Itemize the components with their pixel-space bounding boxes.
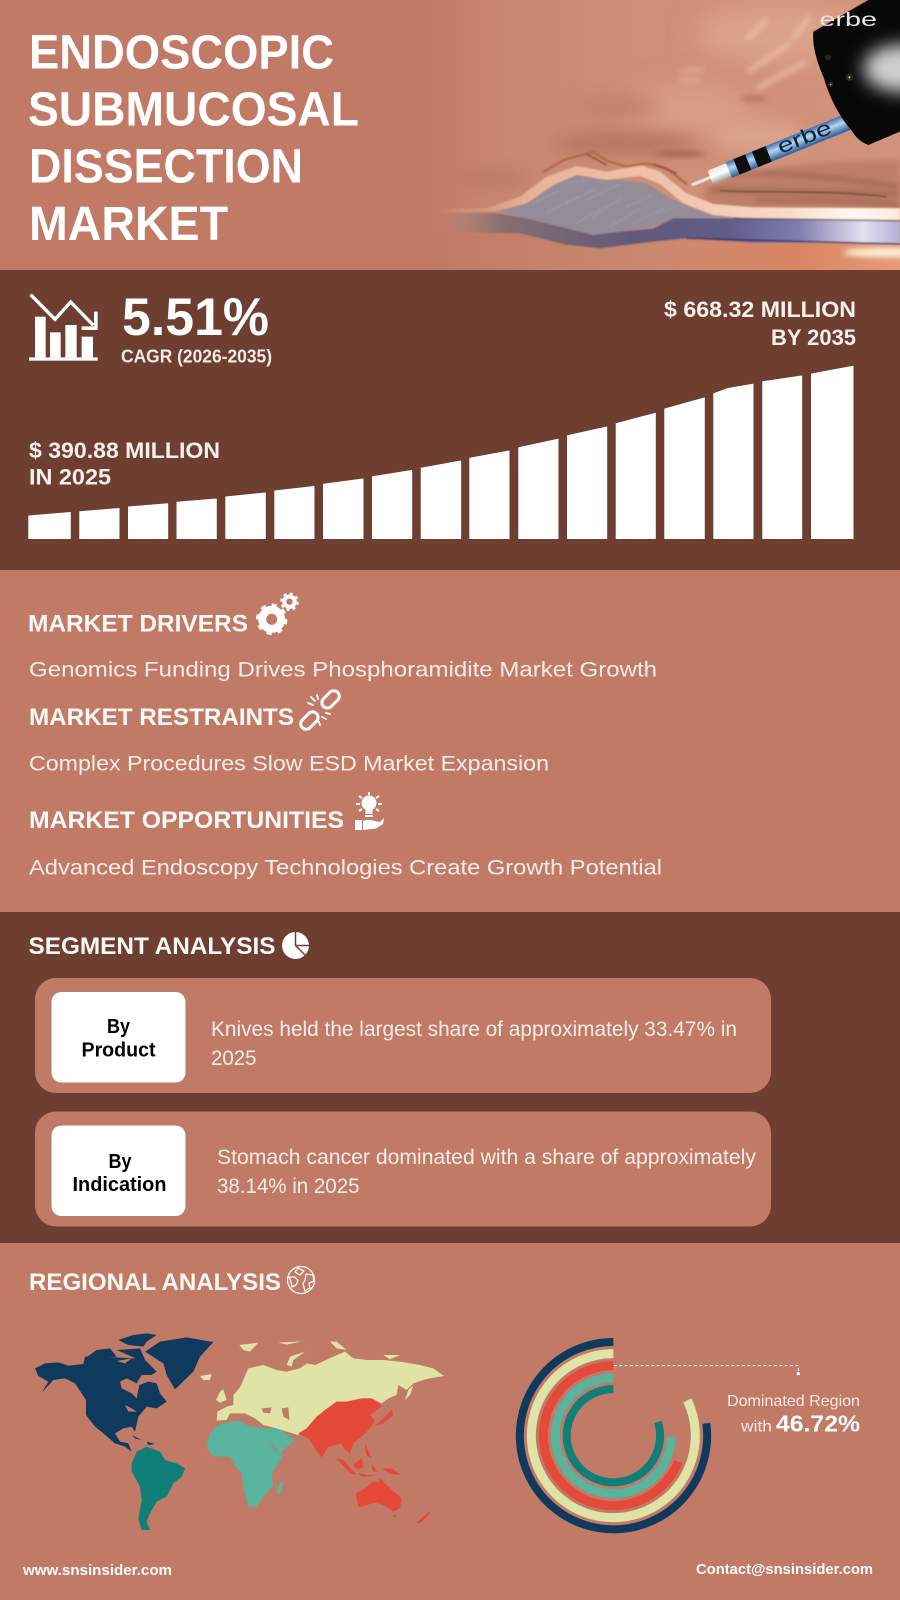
map: South America xyxy=(132,1447,185,1530)
callout line xyxy=(614,1366,800,1375)
ring: Middle East and Africa xyxy=(555,1378,671,1494)
text: restraint: Complex Procedures Slow ESD Market Expansion xyxy=(29,752,549,776)
panel: market size: IN 2025 xyxy=(29,464,111,490)
title: SUBMUCOSAL xyxy=(28,84,359,136)
callout: dominated region xyxy=(727,1393,860,1436)
text: by indication detail: 38.14% in 2025 xyxy=(217,1174,360,1198)
ring: Europe xyxy=(531,1354,695,1518)
map: Europe and northern Asia xyxy=(200,1341,444,1435)
card: by product xyxy=(35,978,771,1093)
ring: North America xyxy=(520,1342,707,1529)
label: by product: By xyxy=(107,1016,131,1038)
footer: contact: Contact@snsinsider.com xyxy=(696,1561,873,1578)
heading: market restraints: MARKET RESTRAINTS xyxy=(29,704,294,731)
CAGR label: CAGR (2026-2035) xyxy=(121,346,272,366)
icon: globe xyxy=(288,1266,314,1294)
heading: regional analysis: REGIONAL ANALYSIS xyxy=(29,1269,281,1296)
label: by indication: Indication xyxy=(72,1174,166,1196)
heading: market drivers xyxy=(28,594,298,638)
chart: concentric regional rings xyxy=(520,1342,800,1529)
text: by product detail xyxy=(211,1017,737,1070)
text: by indication detail xyxy=(217,1145,756,1198)
icon: gears xyxy=(258,594,298,633)
card: by indication xyxy=(35,1112,771,1226)
text: by product detail: 2025 xyxy=(211,1046,257,1070)
text: by product detail: Knives held the largest share of approximately 33.47% in xyxy=(211,1017,737,1041)
text: by indication detail: Stomach cancer dominated with a share of approximately xyxy=(217,1145,756,1169)
world map xyxy=(35,1333,444,1530)
label: by indication xyxy=(52,1126,186,1216)
panel: segment analysis xyxy=(0,912,900,1243)
label: instrument brand: erbe xyxy=(774,116,835,159)
2035 value: $ 668.32 MILLION xyxy=(664,297,856,322)
title xyxy=(28,26,359,251)
2025 value: $ 390.88 MILLION xyxy=(29,438,220,463)
bar chart: growth 2025 to 2035 xyxy=(29,366,853,538)
text: driver: Genomics Funding Drives Phosphoramidite Market Growth xyxy=(29,658,657,682)
heading: market opportunities xyxy=(29,792,384,834)
label: by product xyxy=(52,992,186,1082)
callout: dominated region: 46.72% xyxy=(776,1410,860,1436)
panel: market size xyxy=(0,270,900,570)
panel: market size: BY 2035 xyxy=(771,325,856,350)
ring: Asia Pacific xyxy=(543,1366,678,1506)
submucosa xyxy=(498,175,733,235)
title: MARKET xyxy=(29,198,228,251)
title: ENDOSCOPIC xyxy=(29,26,334,80)
lower band xyxy=(487,234,900,270)
text: opportunity: Advanced Endoscopy Technologies Create Growth Potential xyxy=(29,856,662,880)
muscle layer xyxy=(437,213,900,248)
map: Africa and Middle East xyxy=(207,1421,295,1507)
map: North America xyxy=(35,1333,213,1452)
CAGR value: 5.51% xyxy=(122,288,269,347)
label: by product: Product xyxy=(82,1040,156,1062)
mucosa layer xyxy=(440,165,900,220)
map: Red Sea xyxy=(267,1438,277,1452)
heading: segment analysis: SEGMENT ANALYSIS xyxy=(28,933,276,960)
endoscope head xyxy=(813,0,900,145)
title: DISSECTION xyxy=(29,140,303,194)
icon: bar chart with falling arrow xyxy=(29,295,98,361)
footer: website: www.snsinsider.com xyxy=(22,1562,172,1579)
hero illustration: endoscope dissecting mucosa xyxy=(420,0,900,272)
heading: market drivers: MARKET DRIVERS xyxy=(28,610,248,638)
map: Caspian and Black seas xyxy=(262,1407,289,1420)
label: brand logo: erbe xyxy=(819,10,877,31)
icon: broken chain xyxy=(298,688,342,732)
map: Great Lakes xyxy=(125,1405,137,1412)
label: by indication: By xyxy=(108,1151,132,1173)
icon: hand with light bulb xyxy=(355,792,384,830)
callout: dominated region: Dominated Region xyxy=(727,1393,860,1410)
heading: market restraints xyxy=(29,688,342,732)
heading: market opportunities: MARKET OPPORTUNITIES xyxy=(29,807,344,834)
map: Asia Pacific xyxy=(298,1398,431,1523)
icon: pie chart xyxy=(282,932,309,959)
callout: dominated region: with xyxy=(740,1418,772,1436)
ring: Latin America xyxy=(567,1389,660,1482)
instrument tube xyxy=(691,116,851,186)
